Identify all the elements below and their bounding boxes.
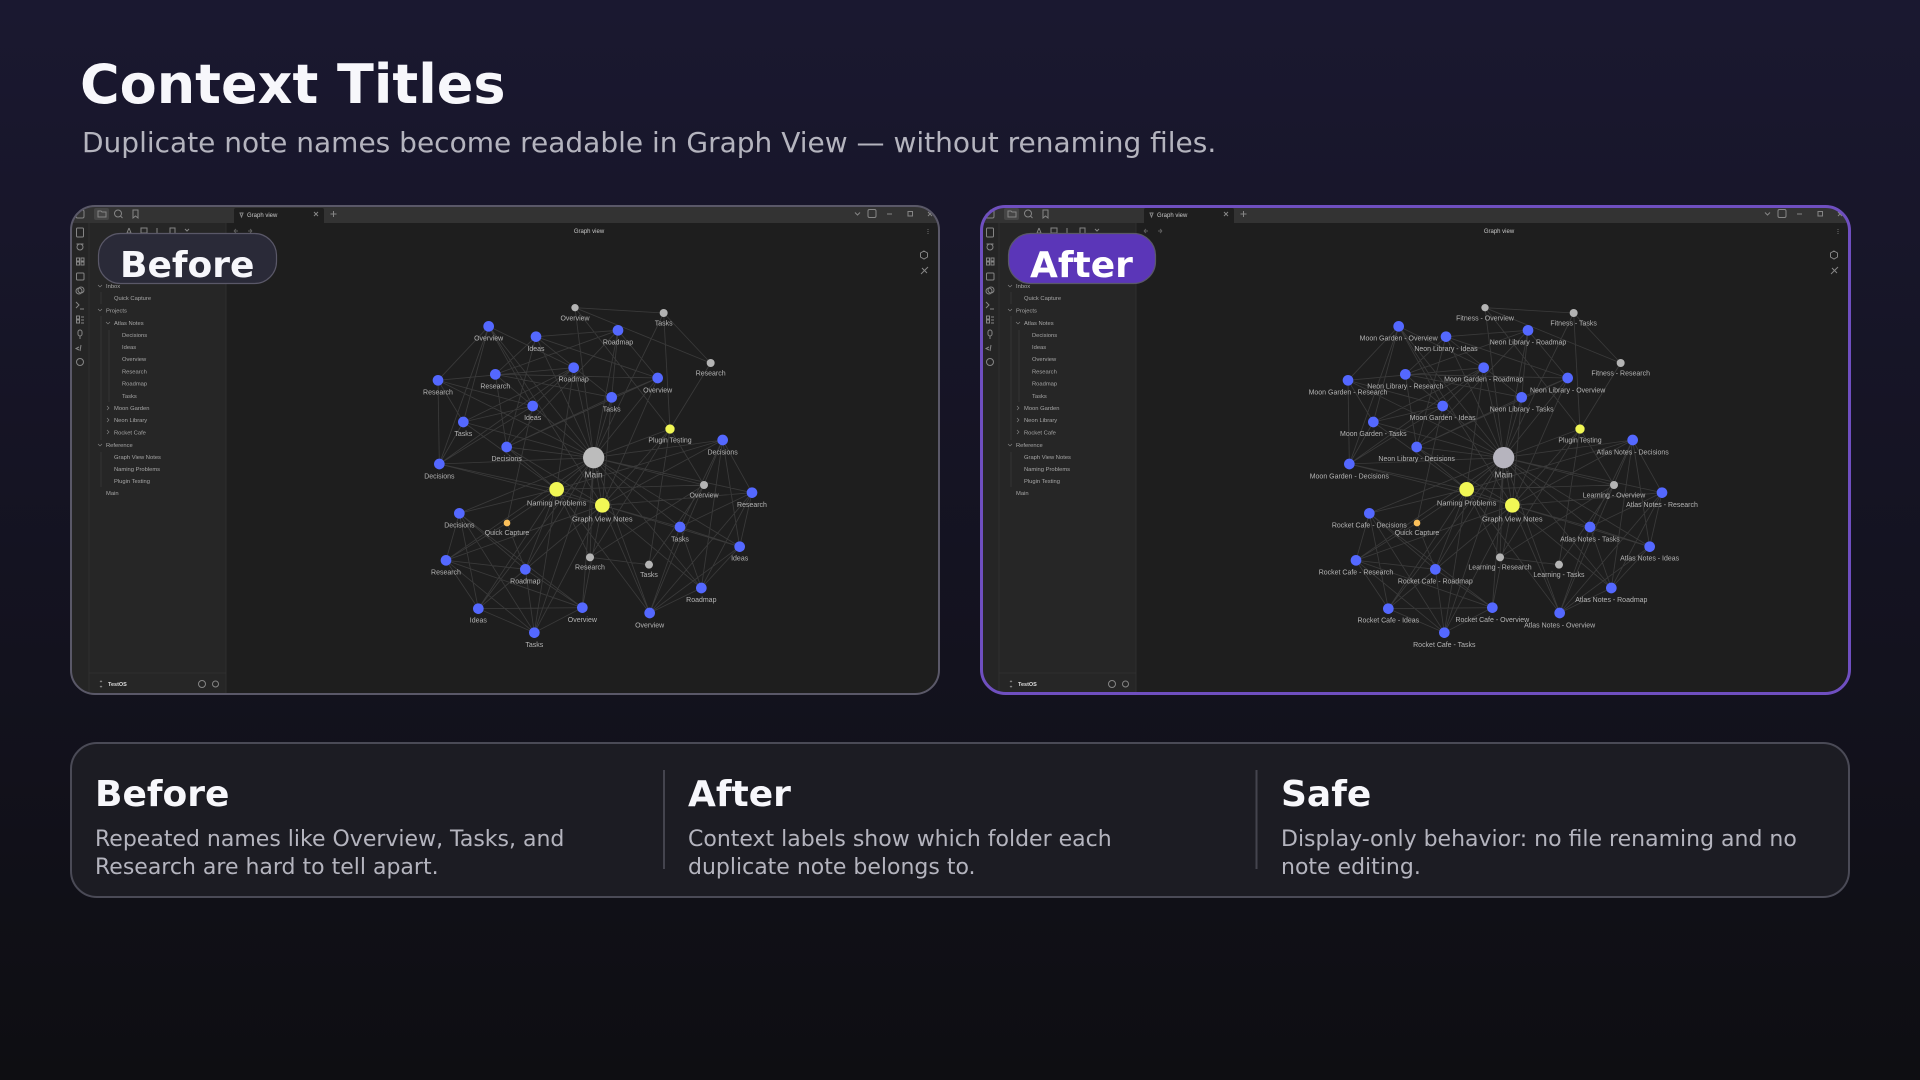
- network graph: repeated names: Overview: [560, 315, 591, 322]
- file tree sidebar: Plugin Testing: [1024, 479, 1060, 485]
- network graph: repeated names: Research: [696, 371, 726, 378]
- badge: After: After: [1030, 245, 1133, 286]
- app window chrome: Graph view: [247, 213, 278, 219]
- badge: Before: [98, 234, 276, 286]
- file tree sidebar: Neon Library: [1024, 418, 1057, 424]
- column: Safe: [1281, 774, 1797, 880]
- panel border: [71, 206, 939, 694]
- network graph: repeated names: Research: [480, 384, 510, 391]
- network graph: context titles: Moon Garden - Tasks: [1340, 431, 1407, 438]
- app window chrome: [980, 205, 1850, 695]
- file tree sidebar: Inbox: [1016, 284, 1030, 290]
- file tree sidebar: Tasks: [122, 394, 137, 400]
- network graph: repeated names: Research: [737, 502, 767, 509]
- network graph: repeated names: Tasks: [603, 407, 621, 414]
- file tree sidebar: [1016, 284, 1071, 497]
- column: After: After: [688, 774, 791, 815]
- network graph: context titles: Learning - Research: [1468, 565, 1532, 572]
- panel border: [982, 206, 1850, 694]
- column: Before: Before: [95, 774, 229, 815]
- badge: Before: Before: [120, 245, 254, 286]
- network graph: repeated names: Quick Capture: [485, 530, 529, 537]
- file tree sidebar: Main: [106, 491, 119, 497]
- network graph: context titles: Graph View Notes: [1482, 515, 1543, 524]
- column: Before: Research are hard to tell apart.: [95, 855, 439, 880]
- network graph: repeated names: Graph View Notes: [572, 515, 633, 524]
- file tree sidebar: Overview: [1032, 357, 1057, 363]
- column: Before: [95, 774, 564, 880]
- file tree sidebar: Reference: [106, 443, 133, 449]
- subtitle: Duplicate note names become readable in Graph View — without renaming files.: [82, 126, 1216, 159]
- file tree sidebar: Reference: [1016, 443, 1043, 449]
- file tree sidebar: Neon Library: [114, 418, 147, 424]
- network graph: context titles: Neon Library - Decisions: [1378, 456, 1455, 463]
- file tree sidebar: Plugin Testing: [114, 479, 150, 485]
- network graph: context titles: Learning - Overview: [1583, 493, 1646, 500]
- file tree sidebar: Atlas Notes: [114, 321, 144, 327]
- file tree sidebar: Graph View Notes: [1024, 455, 1071, 461]
- app window chrome: TestOS: [1018, 682, 1037, 688]
- network graph: repeated names: Research: [423, 390, 453, 397]
- file tree sidebar: Decisions: [122, 333, 147, 339]
- network graph: context titles: Fitness - Overview: [1456, 315, 1515, 322]
- network graph: context titles: Atlas Notes - Tasks: [1560, 536, 1620, 543]
- column: After: duplicate note belongs to.: [688, 855, 976, 880]
- file tree sidebar: Graph View Notes: [114, 455, 161, 461]
- network graph: context titles: Fitness - Tasks: [1550, 320, 1597, 327]
- file tree sidebar: Ideas: [122, 345, 136, 351]
- network graph: repeated names: [423, 304, 767, 649]
- network graph: context titles: Quick Capture: [1395, 530, 1439, 537]
- network graph: context titles: Atlas Notes - Research: [1626, 502, 1698, 509]
- file tree sidebar: Rocket Cafe: [1024, 430, 1056, 436]
- network graph: context titles: Neon Library - Ideas: [1414, 346, 1478, 353]
- file tree sidebar: Inbox: [106, 284, 120, 290]
- network graph: repeated names: Tasks: [671, 536, 689, 543]
- network graph: context titles: Moon Garden - Research: [1309, 390, 1388, 397]
- network graph: repeated names: Tasks: [640, 572, 658, 579]
- network graph: repeated names: Plugin Testing: [648, 438, 692, 445]
- network graph: context titles: Moon Garden - Roadmap: [1444, 377, 1523, 384]
- network graph: context titles: Atlas Notes - Ideas: [1620, 556, 1680, 563]
- network graph: repeated names: Tasks: [655, 320, 673, 327]
- network graph: repeated names: Main: [585, 470, 603, 480]
- file tree sidebar: [106, 284, 161, 497]
- column: After: Context labels show which folder each: [688, 827, 1112, 852]
- file tree sidebar: Overview: [122, 357, 147, 363]
- network graph: repeated names: Decisions: [492, 456, 522, 463]
- network graph: context titles: [1309, 304, 1698, 649]
- file tree sidebar: Tasks: [1032, 394, 1047, 400]
- file tree sidebar: Decisions: [1032, 333, 1057, 339]
- network graph: repeated names: Overview: [689, 493, 720, 500]
- app window chrome: Graph view: [1484, 229, 1515, 235]
- file tree sidebar: Naming Problems: [1024, 467, 1070, 473]
- file tree sidebar: Rocket Cafe: [114, 430, 146, 436]
- network graph: repeated names: Roadmap: [559, 377, 589, 384]
- network graph: repeated names: Overview: [635, 622, 665, 629]
- network graph: repeated names: Ideas: [527, 346, 545, 353]
- network graph: repeated names: Decisions: [444, 523, 475, 530]
- file tree sidebar: Research: [1032, 370, 1057, 376]
- network graph: context titles: Learning - Tasks: [1533, 572, 1585, 579]
- panel: after screenshot: [980, 205, 1850, 695]
- network graph: repeated names: Tasks: [525, 642, 544, 649]
- network graph: context titles: Atlas Notes - Overview: [1524, 622, 1596, 629]
- network graph: context titles: Fitness - Research: [1591, 371, 1650, 378]
- network graph: repeated names: Overview: [643, 387, 673, 394]
- file tree sidebar: Roadmap: [1032, 382, 1057, 388]
- file tree sidebar: Moon Garden: [114, 406, 149, 412]
- network graph: context titles: Neon Library - Research: [1367, 384, 1443, 391]
- network graph: repeated names: Research: [575, 565, 605, 572]
- network graph: context titles: Rocket Cafe - Roadmap: [1398, 578, 1473, 585]
- file tree sidebar: Ideas: [1032, 345, 1046, 351]
- file tree sidebar: Research: [122, 370, 147, 376]
- file tree sidebar: Roadmap: [122, 382, 147, 388]
- title: Context Titles: [80, 53, 506, 116]
- network graph: context titles: Moon Garden - Overview: [1360, 336, 1439, 343]
- file tree sidebar: Atlas Notes: [1024, 321, 1054, 327]
- network graph: repeated names: Ideas: [470, 618, 487, 625]
- network graph: repeated names: Naming Problems: [527, 499, 587, 508]
- file tree sidebar: Quick Capture: [1024, 296, 1061, 302]
- badge: After: [1008, 234, 1156, 286]
- network graph: context titles: Neon Library - Overview: [1530, 387, 1606, 394]
- network graph: repeated names: Decisions: [424, 473, 455, 480]
- network graph: context titles: Plugin Testing: [1558, 438, 1602, 445]
- network graph: repeated names: Overview: [568, 617, 598, 624]
- network graph: context titles: Rocket Cafe - Ideas: [1357, 618, 1420, 625]
- network graph: context titles: Rocket Cafe - Research: [1319, 570, 1393, 577]
- app window chrome: TestOS: [108, 682, 127, 688]
- app window chrome: Graph view: [574, 229, 605, 235]
- network graph: repeated names: Decisions: [708, 449, 738, 456]
- network graph: context titles: Moon Garden - Ideas: [1410, 415, 1476, 422]
- column: Safe: note editing.: [1281, 855, 1421, 880]
- panel: before screenshot: [70, 205, 940, 695]
- file tree sidebar: Projects: [106, 308, 127, 314]
- network graph: repeated names: Roadmap: [603, 339, 633, 346]
- app window chrome: [70, 205, 940, 695]
- network graph: context titles: Atlas Notes - Roadmap: [1575, 597, 1648, 604]
- file tree sidebar: Naming Problems: [114, 467, 160, 473]
- panel: summary card: [71, 743, 1849, 897]
- network graph: repeated names: Research: [431, 570, 461, 577]
- network graph: context titles: Rocket Cafe - Tasks: [1413, 642, 1476, 649]
- network graph: context titles: Rocket Cafe - Overview: [1455, 617, 1530, 624]
- network graph: context titles: Moon Garden - Decisions: [1310, 473, 1389, 480]
- network graph: repeated names: Ideas: [524, 415, 542, 422]
- network graph: context titles: Naming Problems: [1437, 499, 1497, 508]
- file tree sidebar: Main: [1016, 491, 1029, 497]
- network graph: context titles: Main: [1495, 470, 1513, 480]
- network graph: repeated names: Tasks: [454, 431, 473, 438]
- network graph: context titles: Atlas Notes - Decisions: [1597, 449, 1669, 456]
- file tree sidebar: Projects: [1016, 308, 1037, 314]
- network graph: context titles: Rocket Cafe - Decisions: [1332, 523, 1407, 530]
- column: After: [688, 774, 1112, 880]
- file tree sidebar: Moon Garden: [1024, 406, 1059, 412]
- network graph: context titles: Neon Library - Tasks: [1490, 407, 1554, 414]
- column: Safe: Display-only behavior: no file renaming and no: [1281, 827, 1797, 852]
- network graph: repeated names: Roadmap: [686, 597, 717, 604]
- network graph: repeated names: Ideas: [731, 556, 749, 563]
- app window chrome: Graph view: [1157, 213, 1188, 219]
- network graph: repeated names: Roadmap: [510, 578, 541, 585]
- column: Safe: Safe: [1281, 774, 1371, 815]
- column: Before: Repeated names like Overview, Tasks, and: [95, 827, 564, 852]
- network graph: repeated names: Overview: [474, 336, 504, 343]
- network graph: context titles: Neon Library - Roadmap: [1490, 339, 1566, 346]
- file tree sidebar: Quick Capture: [114, 296, 151, 302]
